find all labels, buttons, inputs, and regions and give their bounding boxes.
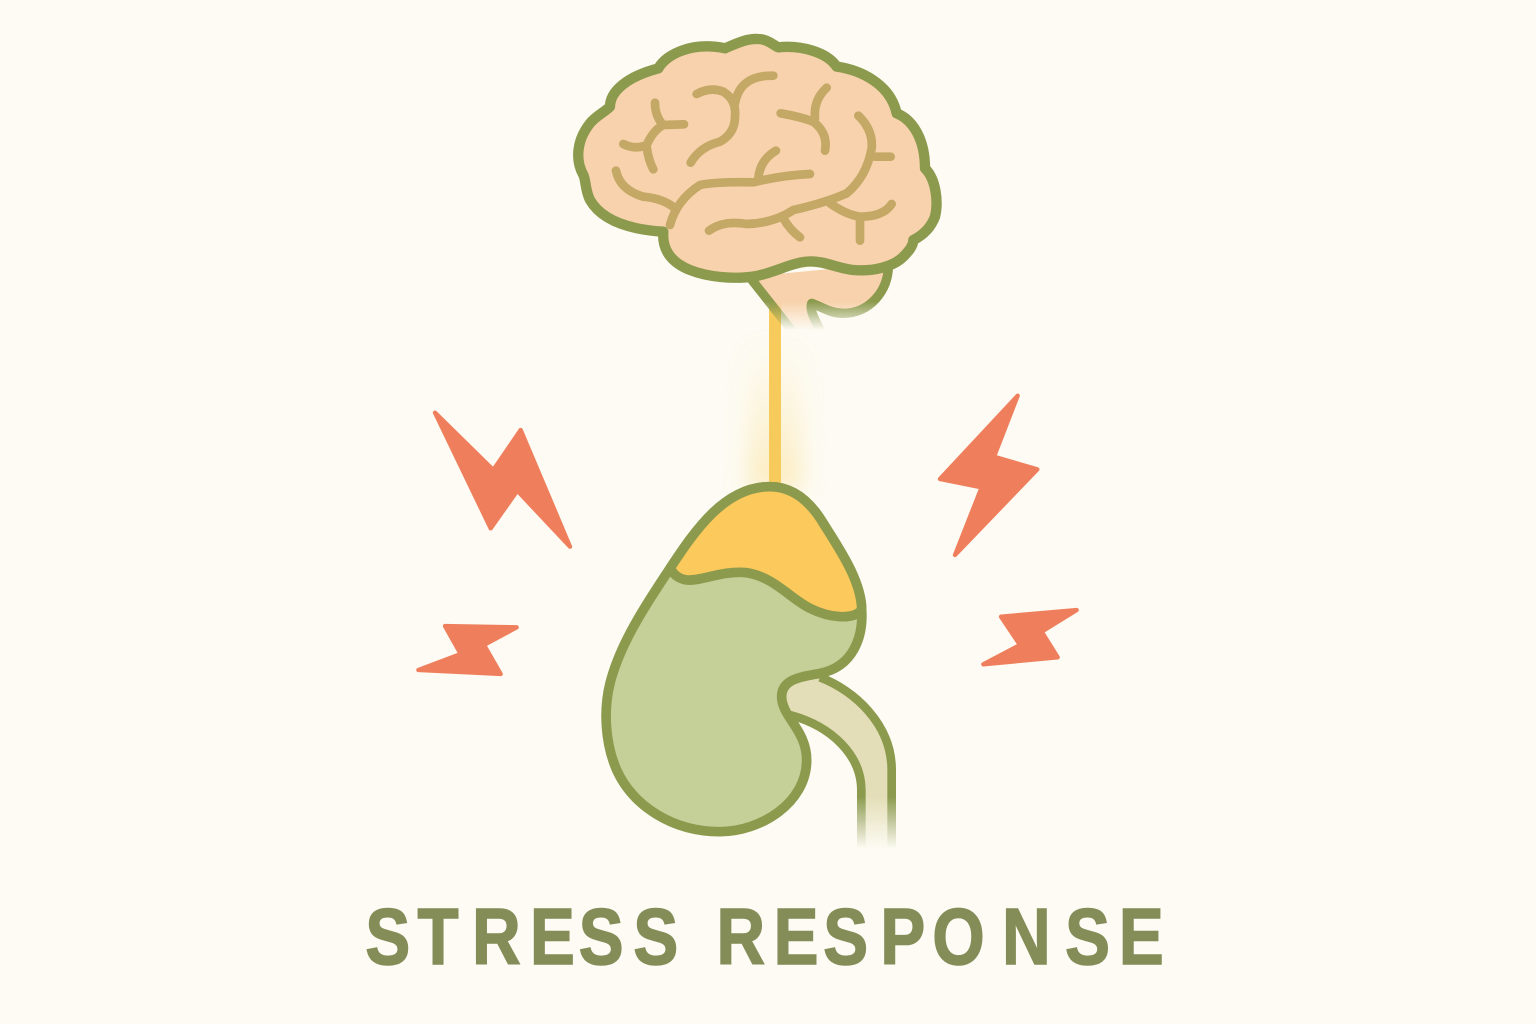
brain stem and cerebellum: [750, 263, 888, 330]
icon: large lightning bolt left: [435, 413, 570, 547]
icon: large lightning bolt right: [940, 396, 1037, 555]
title: STRESS RESPONSE: [365, 891, 1164, 981]
signal line from brain to adrenal gland: [748, 300, 802, 490]
brain folds: [616, 76, 892, 241]
brain outline: [578, 39, 937, 278]
icon: small lightning bolt left: [418, 626, 517, 674]
icon: kidney with adrenal gland: [606, 487, 892, 848]
ureter tube: [786, 676, 896, 846]
icon: brain: [578, 39, 937, 330]
kidney body: [606, 487, 862, 832]
icon: small lightning bolt right: [983, 610, 1077, 664]
adrenal gland: [670, 487, 862, 617]
